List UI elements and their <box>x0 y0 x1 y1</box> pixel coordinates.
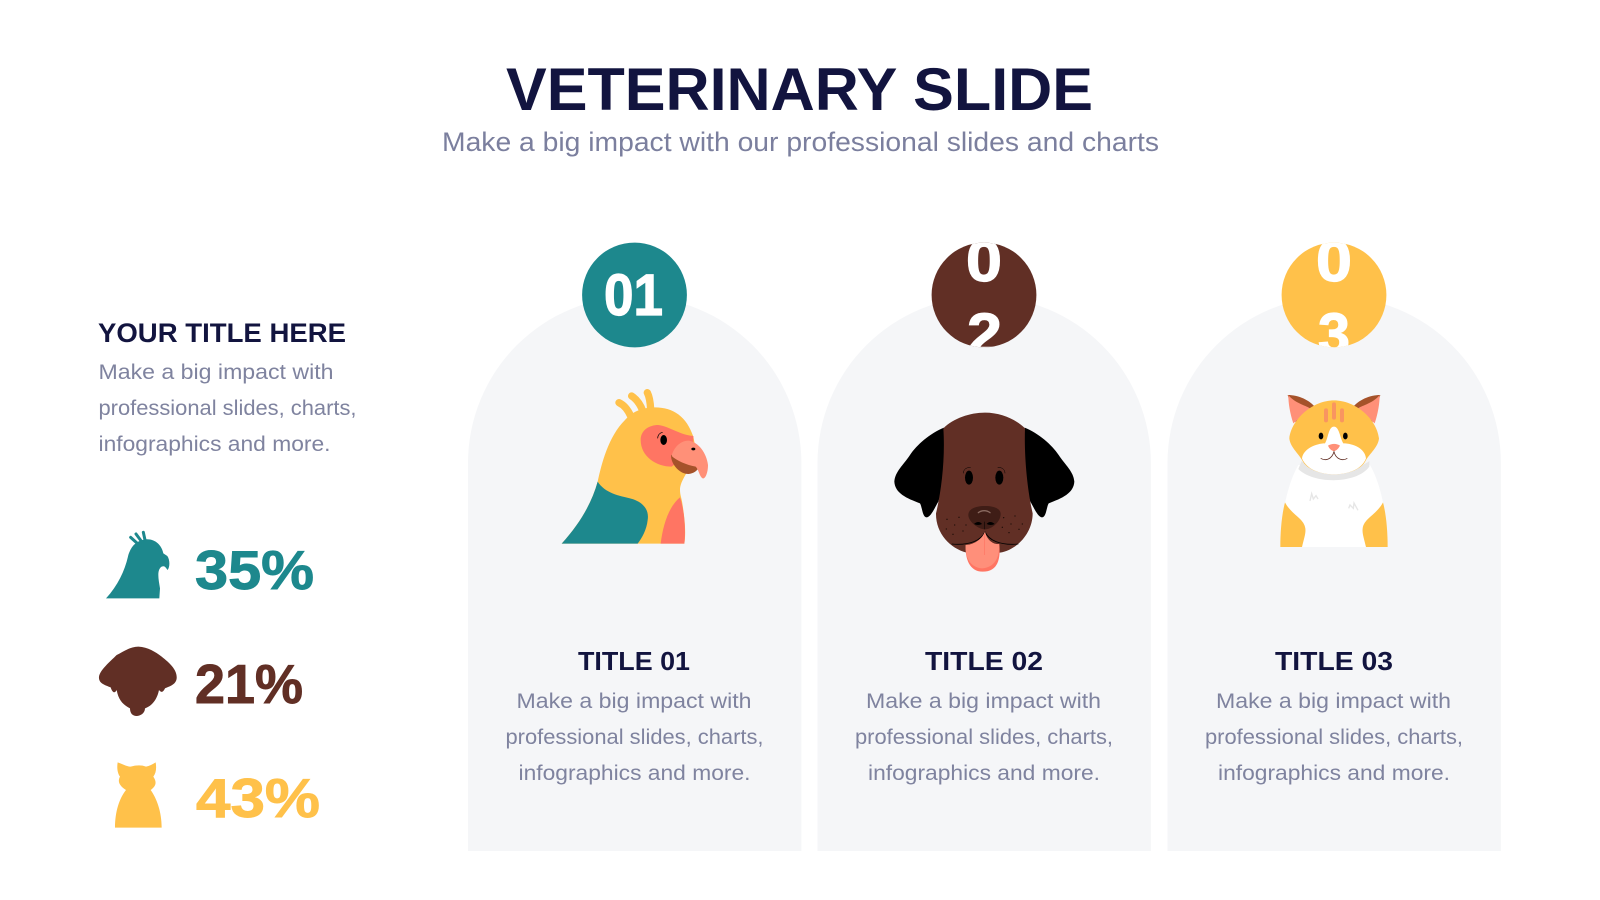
number badge 02: 2 <box>967 302 1002 367</box>
card 02 text: professional slides, charts, <box>855 725 1113 749</box>
left text block <box>98 318 356 456</box>
value 43%: 43% <box>196 767 320 829</box>
icon: parrot silhouette <box>106 532 169 598</box>
card 01 heading: TITLE 01 <box>578 646 690 676</box>
card 03 text: professional slides, charts, <box>1205 725 1463 749</box>
icon: dog silhouette <box>99 647 177 716</box>
card 02 text <box>855 689 1113 785</box>
card 02 heading: TITLE 02 <box>925 646 1043 676</box>
value 35%: 35% <box>195 539 314 601</box>
card 03 text: Make a big impact with <box>1216 689 1451 713</box>
panel: card 03 <box>1168 229 1501 851</box>
card 02 text: Make a big impact with <box>866 689 1101 713</box>
left paragraph: professional slides, charts, <box>98 396 356 420</box>
card 01 text: infographics and more. <box>518 761 750 785</box>
card background <box>818 296 1151 851</box>
subtitle: Make a big impact with our professional slides and charts <box>442 127 1159 157</box>
number badge 02 <box>932 242 1036 348</box>
number badge 01: 01 <box>604 263 663 328</box>
panel: card 01 <box>468 243 801 851</box>
illustration: cat <box>1280 395 1388 547</box>
illustration: dog <box>894 413 1074 572</box>
value 21%: 21% <box>195 653 303 715</box>
card 03 text: infographics and more. <box>1218 761 1450 785</box>
card 01 text <box>506 689 764 785</box>
stat: dog 21% <box>99 647 303 716</box>
left heading: YOUR TITLE HERE <box>98 318 346 348</box>
illustration: parrot <box>562 393 708 544</box>
stat: cat 43% <box>115 762 320 829</box>
number badge 03 <box>1282 242 1386 348</box>
left paragraph: infographics and more. <box>98 432 330 456</box>
card 02 text: infographics and more. <box>868 761 1100 785</box>
icon: cat silhouette <box>115 762 162 828</box>
stat: parrot 35% <box>106 532 314 601</box>
card 03 heading: TITLE 03 <box>1275 646 1393 676</box>
number badge 01 <box>582 243 687 347</box>
card 01 text: professional slides, charts, <box>506 725 764 749</box>
card background <box>468 296 801 851</box>
left paragraph <box>98 360 356 456</box>
panel: card 02 <box>818 229 1151 851</box>
card 01 text: Make a big impact with <box>516 689 752 713</box>
card background <box>1168 296 1501 851</box>
number badge 03: 0 <box>1316 229 1352 294</box>
title: VETERINARY SLIDE <box>506 56 1093 123</box>
number badge 02: 0 <box>966 229 1002 294</box>
card 03 text <box>1205 689 1463 785</box>
left paragraph: Make a big impact with <box>98 360 334 384</box>
number badge 03: 3 <box>1318 302 1350 367</box>
slide canvas <box>98 68 1500 851</box>
